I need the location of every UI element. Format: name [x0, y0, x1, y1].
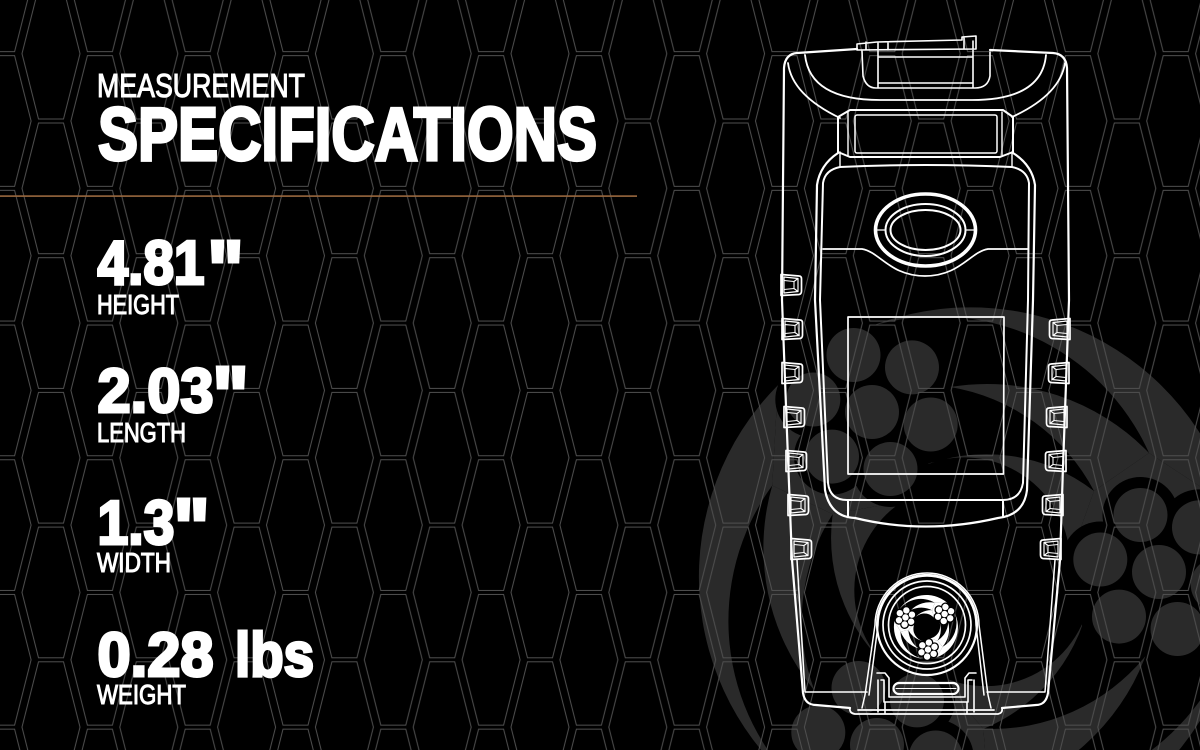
spec: width: 1.3	[98, 489, 174, 558]
screen	[848, 317, 1004, 474]
heading line: specifications: SPECIFICATIONS	[98, 92, 597, 176]
bottom logo emblem	[862, 573, 991, 708]
spec: height: HEIGHT	[97, 289, 179, 320]
top cap arcs	[788, 55, 1065, 118]
spec: length: 2.03	[98, 357, 214, 426]
spec: weight	[97, 621, 314, 710]
spec: length	[97, 352, 246, 448]
device outer body	[782, 49, 1069, 708]
left side tabs	[781, 274, 812, 560]
heading	[97, 68, 597, 176]
spec: weight: WEIGHT	[97, 679, 186, 710]
background swirl logo	[604, 307, 1200, 750]
top clip	[857, 36, 990, 88]
spec: weight: lbs	[235, 621, 314, 690]
emblem arch	[862, 573, 991, 708]
panel divider curve	[823, 249, 1028, 276]
bridge	[838, 110, 1013, 167]
spec: width: ''	[176, 484, 208, 570]
spec: height	[97, 226, 242, 320]
spec: length: ''	[214, 352, 246, 438]
spec: width	[97, 484, 208, 578]
main panel inner outline	[820, 165, 1029, 517]
spec: width: WIDTH	[97, 547, 171, 578]
orange divider rule	[0, 195, 637, 197]
spec: length: LENGTH	[97, 417, 186, 448]
spec: height: ''	[210, 226, 242, 312]
right side tabs	[1040, 318, 1070, 560]
oval button	[876, 194, 976, 266]
device line drawing	[781, 36, 1070, 714]
spec: weight: 0.28	[98, 621, 214, 690]
main panel outline	[815, 153, 1035, 526]
emblem rings	[877, 575, 977, 675]
lower inner body lines	[797, 560, 1055, 692]
bottom bracket	[850, 673, 1002, 714]
spec: height: 4.81	[98, 229, 204, 298]
heading line: measurement: MEASUREMENT	[97, 68, 305, 105]
emblem swirl	[880, 581, 964, 665]
